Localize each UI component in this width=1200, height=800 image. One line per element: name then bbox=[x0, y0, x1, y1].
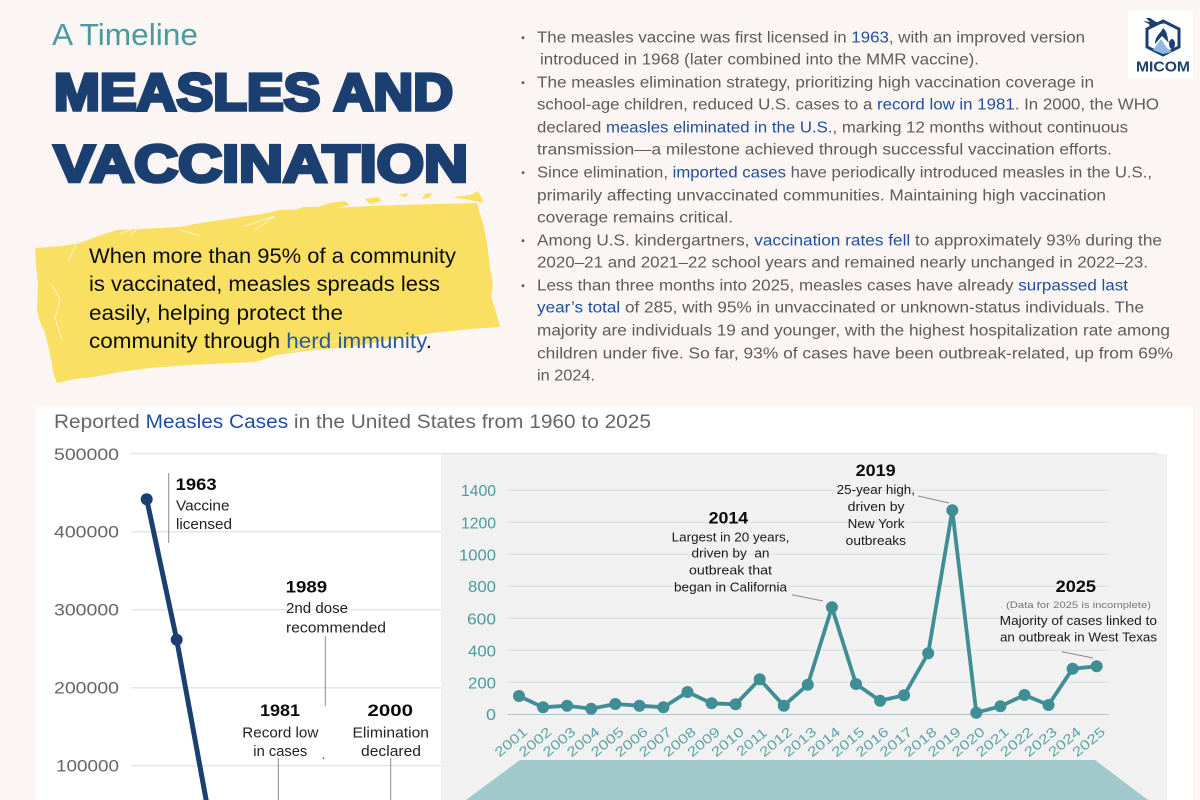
bullet: elimination strategy: transmission—a milestone achieved through successful vaccination efforts. bbox=[537, 142, 1112, 159]
annotation: 2014: began in California bbox=[674, 580, 788, 595]
y axis labels: 100000 bbox=[56, 758, 119, 776]
x axis year labels: 2008 bbox=[660, 724, 699, 760]
bullet: 2025 cases: majority are individuals 19 and younger, with the highest hospitalization rate among bbox=[537, 323, 1170, 340]
y axis labels bbox=[54, 446, 119, 776]
bullet: 2025 cases: year’s total of 285, with 95% in unvaccinated or unknown-status individuals. The bbox=[537, 300, 1144, 317]
y axis labels: 400 bbox=[468, 643, 496, 660]
x axis year labels: 2017 bbox=[877, 724, 915, 760]
bullet: imported cases: Since elimination, imported cases have periodically introduced measles in the U.S., bbox=[537, 165, 1152, 182]
x axis year labels: 2021 bbox=[973, 724, 1012, 760]
y axis labels: 1400 bbox=[461, 483, 496, 500]
x axis year labels bbox=[492, 724, 1108, 760]
annotation: 1963: licensed bbox=[176, 517, 232, 533]
bullet: imported cases: primarily affecting unvaccinated communities. Maintaining high vaccination bbox=[537, 188, 1106, 205]
y axis labels: 1000 bbox=[459, 547, 496, 564]
annotation: 2025 bbox=[1000, 577, 1158, 658]
yellow brush stroke shape bbox=[35, 203, 500, 383]
x axis year labels: 2012 bbox=[756, 724, 795, 760]
bullet: elimination strategy bbox=[522, 75, 1159, 159]
annotation: 2000: Elimination bbox=[352, 725, 429, 741]
callout text: is vaccinated, measles spreads less bbox=[89, 273, 440, 296]
annotation: 1989 bbox=[286, 578, 386, 706]
y axis labels: 400000 bbox=[54, 524, 119, 542]
annotation: 2025: Majority of cases linked to bbox=[1000, 613, 1157, 628]
brush scratches bbox=[52, 216, 340, 352]
heading: Vaccination: VACCINATION bbox=[54, 135, 468, 193]
bullet: elimination strategy: declared measles eliminated in the U.S. , marking 12 months without continuous bbox=[537, 120, 1128, 137]
y axis labels bbox=[459, 483, 496, 724]
annotation: 2014: driven by an bbox=[692, 546, 770, 561]
bullet: kindergarten rates bbox=[522, 233, 1162, 272]
x axis year labels: 2015 bbox=[829, 724, 867, 760]
bullet: elimination strategy: The measles elimination strategy, prioritizing high vaccination coverage in bbox=[537, 75, 1094, 92]
x axis year labels: 2023 bbox=[1021, 724, 1060, 760]
annotation: 2019: 2019 bbox=[856, 461, 896, 480]
bullet: 2025 cases bbox=[522, 278, 1173, 385]
annotation: 1981 bbox=[242, 701, 319, 800]
x axis year labels: 2018 bbox=[901, 724, 940, 760]
annotation: 1989: 2nd dose bbox=[286, 601, 348, 617]
bullet: vaccine licensed: The measles vaccine was first licensed in 1963, with an improved version bbox=[537, 30, 1085, 47]
bullet: kindergarten rates: 2020–21 and 2021–22 school years and remained nearly unchanged in 2022–23. bbox=[537, 255, 1148, 272]
x axis year labels: 2014 bbox=[805, 724, 844, 760]
y axis labels: 300000 bbox=[54, 602, 119, 620]
y axis labels: 200000 bbox=[54, 680, 119, 698]
bullet: 2025 cases: Less than three months into 2025, measles cases have already surpassed last bbox=[537, 278, 1129, 295]
heading: Measles and: MEASLES AND bbox=[54, 64, 453, 122]
x axis year labels: 2024 bbox=[1045, 724, 1084, 760]
annotation: 2014: Largest in 20 years, bbox=[672, 530, 790, 545]
x axis year labels: 2001 bbox=[492, 724, 530, 760]
callout text: community through herd immunity . bbox=[89, 330, 432, 353]
callout text: easily, helping protect the bbox=[89, 302, 343, 325]
y axis labels: 600 bbox=[467, 611, 496, 628]
line chart: 1960 to 2000 cases bbox=[54, 446, 1158, 800]
annotation: 2025: (Data for 2025 is incomplete) bbox=[1006, 600, 1151, 611]
data line and markers bbox=[513, 504, 1103, 719]
annotation: 2019: driven by bbox=[848, 499, 905, 514]
x axis year labels: 2002 bbox=[516, 724, 554, 760]
x axis year labels: 2016 bbox=[853, 724, 891, 760]
x axis year labels: 2007 bbox=[636, 724, 675, 760]
bullet: vaccine licensed: introduced in 1968 (later combined into the MMR vaccine). bbox=[540, 51, 979, 68]
x axis year labels: 2020 bbox=[949, 724, 988, 760]
y axis labels: 0 bbox=[486, 707, 496, 724]
x axis year labels: 2005 bbox=[588, 724, 627, 760]
data line bbox=[141, 493, 206, 800]
logo: MICOM: MICOM bbox=[1136, 58, 1190, 75]
callout: herd immunity on yellow brush stroke bbox=[35, 191, 500, 383]
annotation: 1989: 1989 bbox=[286, 578, 327, 597]
x axis year labels: 2022 bbox=[997, 724, 1036, 760]
bullet: elimination strategy: school-age children, reduced U.S. cases to a record low in 1981 . In 2000, the WHO bbox=[537, 97, 1159, 114]
key facts bullet list bbox=[522, 30, 1173, 385]
annotation: 1963: Vaccine bbox=[176, 498, 230, 514]
y axis labels: 500000 bbox=[54, 446, 119, 464]
annotation: 1981: in cases bbox=[253, 744, 307, 760]
annotation: 1981: 1981 bbox=[260, 701, 300, 720]
annotation: 2019: 25-year high, bbox=[837, 482, 915, 497]
bullet: imported cases bbox=[522, 165, 1152, 227]
annotation: 1981: Record low bbox=[242, 725, 319, 741]
teal trapezoid base bbox=[466, 760, 1148, 800]
line chart: 2001 to 2025 cases bbox=[459, 461, 1158, 760]
x axis year labels: 2010 bbox=[708, 724, 747, 760]
annotation: 2000: declared bbox=[361, 744, 421, 760]
logo: MICOM bbox=[1128, 11, 1193, 79]
annotation: 2000: 2000 bbox=[368, 701, 413, 720]
annotation: 2019: New York bbox=[848, 516, 905, 531]
y axis labels: 800 bbox=[468, 579, 496, 596]
annotation: 2014: outbreak that bbox=[689, 562, 772, 577]
panel: reported measles cases chart bbox=[36, 406, 1193, 800]
bullet: 2025 cases: in 2024. bbox=[537, 368, 595, 385]
x axis year labels: 2019 bbox=[925, 724, 964, 760]
annotation: 2019 bbox=[837, 461, 949, 548]
kicker: A Timeline: A Timeline bbox=[52, 17, 198, 52]
annotation: 1989: recommended bbox=[286, 620, 386, 636]
inset panel background bbox=[441, 454, 1167, 800]
x axis year labels: 2009 bbox=[684, 724, 723, 760]
annotation: 2025: 2025 bbox=[1056, 577, 1096, 596]
x axis year labels: 2013 bbox=[780, 724, 819, 760]
callout text: When more than 95% of a community bbox=[89, 245, 457, 268]
chart title: Reported Measles Cases in the United States from 1960 to 2025 bbox=[54, 412, 651, 433]
x axis year labels: 2025 bbox=[1069, 724, 1108, 760]
x axis year labels: 2006 bbox=[612, 724, 651, 760]
annotation: 2025: an outbreak in West Texas bbox=[1000, 630, 1158, 645]
bullet: vaccine licensed bbox=[522, 30, 1085, 68]
bullet: 2025 cases: children under five. So far, 93% of cases have been outbreak-related, up from 69% bbox=[537, 346, 1173, 363]
annotation: 1963: 1963 bbox=[176, 475, 217, 494]
callout text bbox=[89, 245, 457, 353]
annotation: 2000 bbox=[352, 701, 429, 800]
x axis year labels: 2011 bbox=[733, 725, 770, 759]
x axis year labels: 2003 bbox=[540, 724, 578, 760]
annotation: 2014: 2014 bbox=[709, 509, 749, 528]
y axis labels: 200 bbox=[468, 675, 496, 692]
title block bbox=[52, 17, 468, 193]
annotation: 2014 bbox=[672, 509, 823, 601]
bullet: imported cases: coverage remains critical. bbox=[537, 210, 733, 227]
y axis labels: 1200 bbox=[461, 515, 496, 532]
bullet: kindergarten rates: Among U.S. kindergartners, vaccination rates fell to approximately 93% during the bbox=[537, 233, 1162, 250]
annotation: 2019: outbreaks bbox=[846, 533, 907, 548]
brush flecks bbox=[293, 191, 484, 221]
x axis year labels: 2004 bbox=[564, 724, 603, 760]
annotation: 1963 bbox=[169, 473, 232, 543]
